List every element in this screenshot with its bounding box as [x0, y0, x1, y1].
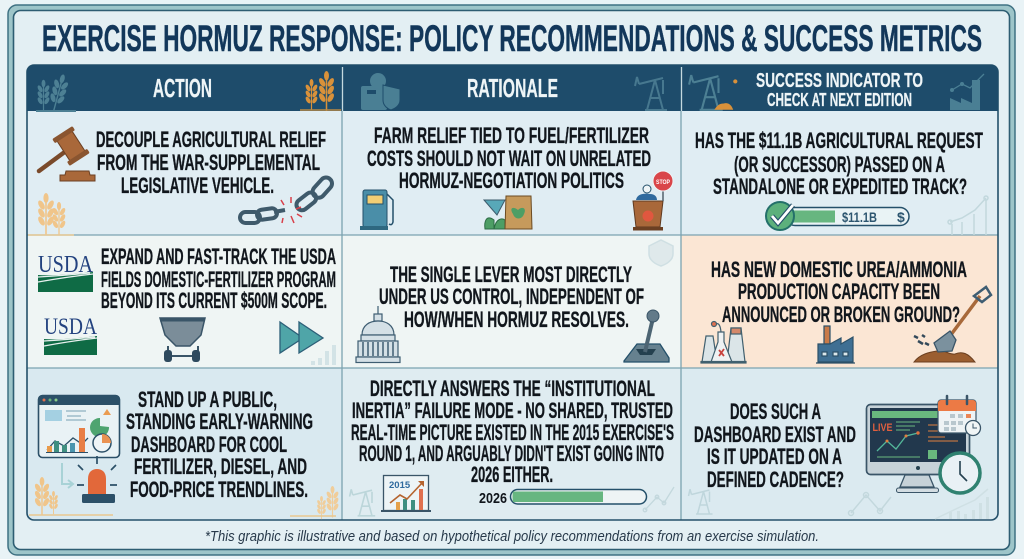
icon: lever: [624, 310, 669, 362]
progress: 2026: [479, 490, 646, 507]
icon: faint growth chart: [948, 196, 988, 235]
icon: flasks and towers: [701, 322, 746, 363]
icon: monitor with clock and calendar: [866, 396, 980, 493]
icon: podium and stop sign: STOP: [656, 179, 671, 186]
text: action 1: [96, 127, 326, 198]
icon: capitol dome: [356, 306, 400, 362]
icon: USDA logo top: [38, 252, 94, 292]
heading: action: ACTION: [153, 75, 212, 103]
icon: USDA logo top: USDA: [38, 252, 94, 278]
icon: faint shield: [649, 240, 673, 266]
icon: podium and stop sign: [633, 171, 673, 230]
text: rationale 3: INERTIA” FAILURE MODE - NO SHARED, TRUSTED: [352, 398, 673, 423]
text: indicator 1: [695, 128, 983, 199]
icon: 2015 chart: [381, 476, 431, 512]
heading: success indicator: CHECK AT NEXT EDITION: [767, 89, 912, 110]
icon: faint pumpjack right: [688, 489, 712, 514]
text: indicator 3: [694, 399, 856, 492]
text: action 3: FOOD-PRICE TRENDLINES.: [130, 477, 308, 502]
icon: wheat bottom left: [29, 477, 113, 515]
text: rationale 1: [367, 123, 651, 193]
text: indicator 3: DASHBOARD EXIST AND: [694, 422, 856, 447]
icon: shovel and soil: [914, 287, 991, 362]
icon: 2015 chart: 2015: [389, 480, 411, 491]
icon: factory: [816, 326, 855, 363]
text: action 1: DECOUPLE AGRICULTURAL RELIEF: [96, 127, 326, 152]
text: action 2: EXPAND AND FAST-TRACK THE USDA: [101, 244, 336, 269]
text: rationale 2: HOW/WHEN HORMUZ RESOLVES.: [404, 307, 629, 332]
icon: fast forward: [280, 322, 323, 353]
text: action 2: FIELDS DOMESTIC-FERTILIZER PROGRAM: [101, 267, 336, 292]
icon: fertilizer spreader: [160, 318, 205, 362]
arrow: dashboard to alert: [62, 463, 73, 488]
heading: success indicator: SUCCESS INDICATOR TO: [756, 69, 923, 92]
icon: faded wheat: [28, 193, 74, 236]
progress: $11.1B: $: [897, 209, 905, 225]
icon: header factory: [950, 74, 984, 110]
icon: faint bar chart: [935, 489, 989, 519]
icon: faint trend line: [848, 492, 891, 516]
text: action 3: FERTILIZER, DIESEL, AND: [134, 454, 307, 479]
progress: $11.1B: $11.1B: [842, 209, 877, 225]
text: action 3: DASHBOARD FOR COOL: [131, 432, 287, 457]
text: rationale 3: 2026 EITHER.: [471, 462, 553, 487]
icon: broken chain: [240, 175, 334, 223]
text: rationale 3: ROUND 1, AND ARGUABLY DIDN'T EXIST GOING INTO: [359, 441, 664, 466]
icon: USDA logo bottom: [44, 314, 97, 355]
icon: monitor with clock and calendar: LIVE: [872, 422, 892, 434]
text: action 3: STAND UP A PUBLIC,: [138, 387, 277, 412]
text: action 3: STANDING EARLY-WARNING: [126, 409, 313, 434]
progress: $11.1B: [766, 202, 909, 230]
text: indicator 2: [711, 257, 967, 327]
text: rationale 3: [351, 376, 674, 487]
icon: faint bars: [311, 345, 336, 365]
icon: header pumpjack: [689, 75, 737, 110]
icon: header plant: [36, 72, 76, 113]
icon: fuel pump: [360, 190, 393, 230]
icon: dashboard: [38, 396, 120, 458]
text: rationale 1: COSTS SHOULD NOT WAIT ON UNRELATED: [367, 146, 651, 171]
text: rationale 3: REAL-TIME PICTURE EXISTED IN THE 2015 EXERCISE'S: [351, 420, 674, 445]
text: rationale 1: FARM RELIEF TIED TO FUEL/FERTILIZER: [374, 123, 649, 148]
icon: header wheat: [300, 71, 341, 111]
icon: wheat bottom right: [290, 486, 339, 519]
text: rationale 2: UNDER US CONTROL, INDEPENDENT OF: [379, 284, 644, 309]
text: action 3: [126, 387, 313, 502]
icon: faint line chart: [643, 487, 674, 512]
icon: faint pumpjack left: [350, 489, 375, 516]
text: indicator 3: DEFINED CADENCE?: [707, 467, 844, 492]
text: rationale 2: THE SINGLE LEVER MOST DIRECTLY: [390, 262, 632, 287]
header band: [27, 65, 998, 111]
icon: header fuel and shield: [361, 73, 400, 110]
icon: gavel: [39, 126, 95, 181]
text: indicator 3: DOES SUCH A: [730, 399, 821, 424]
icon: fertilizer bag and plant: [484, 196, 532, 229]
icon: header pumpjack right: [635, 77, 667, 110]
table grid: [27, 65, 998, 520]
icon: siren: [77, 456, 117, 503]
text: action 2: [101, 244, 336, 313]
text: action 1: LEGISLATIVE VEHICLE.: [121, 173, 274, 198]
text: action 2: BEYOND ITS CURRENT $500M SCOPE.: [101, 288, 327, 313]
footnote: *This graphic is illustrative and based on hypothetical policy recommendations from an exercise simulation.: [205, 529, 819, 545]
text: action 1: FROM THE WAR-SUPPLEMENTAL: [97, 150, 320, 175]
text: rationale 3: DIRECTLY ANSWERS THE “INSTITUTIONAL: [370, 376, 655, 401]
heading: rationale: RATIONALE: [467, 75, 558, 103]
icon: USDA logo bottom: USDA: [44, 314, 97, 339]
progress: 2026: 2026: [479, 490, 507, 507]
text: rationale 1: HORMUZ-NEGOTIATION POLITICS: [399, 168, 624, 193]
heading: success indicator: [756, 69, 923, 110]
text: rationale 2: [379, 262, 644, 332]
text: indicator 3: IS IT UPDATED ON A: [707, 444, 842, 469]
